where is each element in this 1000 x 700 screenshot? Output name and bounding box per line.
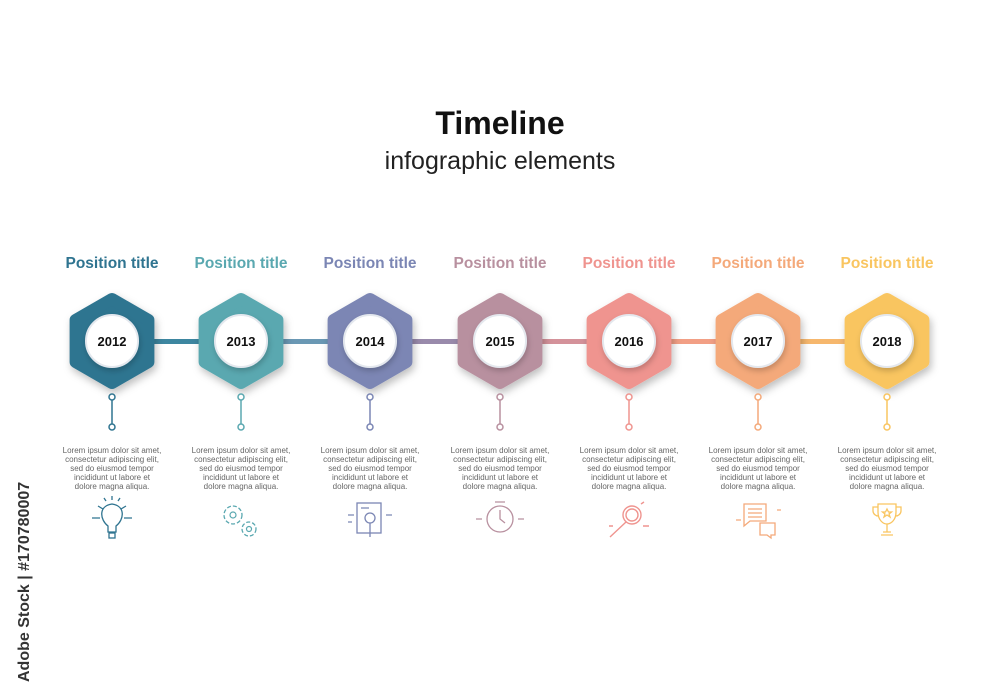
step 2016: consectetur adipiscing elit, bbox=[582, 455, 676, 464]
step 2018: sed do eiusmod tempor bbox=[845, 464, 929, 473]
step 2016: Lorem ipsum dolor sit amet, bbox=[580, 446, 678, 455]
step 2014: Position title bbox=[324, 255, 417, 272]
step 2012: 2012 bbox=[98, 334, 126, 349]
step 2018 bbox=[838, 255, 936, 535]
step 2018: Lorem ipsum dolor sit amet, bbox=[838, 446, 936, 455]
step 2017: Lorem ipsum dolor sit amet, bbox=[709, 446, 807, 455]
step 2015: Lorem ipsum dolor sit amet, bbox=[451, 446, 549, 455]
step 2014: dolore magna aliqua. bbox=[333, 482, 407, 491]
step 2016: Position title bbox=[582, 255, 676, 272]
step 2015: incididunt ut labore et bbox=[462, 473, 539, 482]
step 2015: Position title bbox=[454, 255, 547, 272]
step 2012: Lorem ipsum dolor sit amet, bbox=[63, 446, 161, 455]
step 2017: 2017 bbox=[744, 334, 772, 349]
step 2016: dolore magna aliqua. bbox=[592, 482, 666, 491]
step 2014: 2014 bbox=[356, 334, 385, 349]
step 2013: dolore magna aliqua. bbox=[204, 482, 278, 491]
title: Timeline bbox=[435, 105, 565, 141]
step 2013: consectetur adipiscing elit, bbox=[194, 455, 288, 464]
step 2017: dolore magna aliqua. bbox=[721, 482, 795, 491]
step 2018: Position title bbox=[840, 255, 934, 272]
step 2015: dolore magna aliqua. bbox=[463, 482, 537, 491]
step 2014: sed do eiusmod tempor bbox=[328, 464, 412, 473]
step 2013: 2013 bbox=[227, 334, 255, 349]
step 2015: consectetur adipiscing elit, bbox=[453, 455, 547, 464]
step 2012: dolore magna aliqua. bbox=[75, 482, 149, 491]
step 2014: Lorem ipsum dolor sit amet, bbox=[321, 446, 419, 455]
subtitle: infographic elements bbox=[385, 147, 615, 175]
connector line bbox=[150, 339, 856, 344]
step 2013: sed do eiusmod tempor bbox=[199, 464, 283, 473]
step 2013: incididunt ut labore et bbox=[203, 473, 280, 482]
step 2015: sed do eiusmod tempor bbox=[458, 464, 542, 473]
step 2012: sed do eiusmod tempor bbox=[70, 464, 154, 473]
step 2017 bbox=[709, 255, 807, 538]
step 2015: 2015 bbox=[486, 334, 514, 349]
watermark side text: Adobe Stock | #170780007 bbox=[16, 482, 33, 682]
step 2017: incididunt ut labore et bbox=[720, 473, 797, 482]
step 2017: Position title bbox=[712, 255, 805, 272]
step 2012 bbox=[63, 255, 161, 538]
step 2014 bbox=[321, 255, 419, 537]
step 2014: consectetur adipiscing elit, bbox=[323, 455, 417, 464]
step 2013 bbox=[192, 255, 290, 536]
step 2018: dolore magna aliqua. bbox=[850, 482, 924, 491]
step 2016: 2016 bbox=[615, 334, 643, 349]
step 2017: sed do eiusmod tempor bbox=[716, 464, 800, 473]
step 2014: incididunt ut labore et bbox=[332, 473, 409, 482]
step 2012: consectetur adipiscing elit, bbox=[65, 455, 159, 464]
step 2016 bbox=[580, 255, 678, 537]
step 2013: Position title bbox=[194, 255, 288, 272]
step 2018: incididunt ut labore et bbox=[849, 473, 926, 482]
step 2012: Position title bbox=[66, 255, 159, 272]
step 2016: incididunt ut labore et bbox=[591, 473, 668, 482]
step 2016: sed do eiusmod tempor bbox=[587, 464, 671, 473]
step 2013: Lorem ipsum dolor sit amet, bbox=[192, 446, 290, 455]
step 2018: consectetur adipiscing elit, bbox=[840, 455, 934, 464]
step 2017: consectetur adipiscing elit, bbox=[711, 455, 805, 464]
step 2012: incididunt ut labore et bbox=[74, 473, 151, 482]
step 2015 bbox=[451, 255, 549, 532]
step 2018: 2018 bbox=[873, 334, 901, 349]
